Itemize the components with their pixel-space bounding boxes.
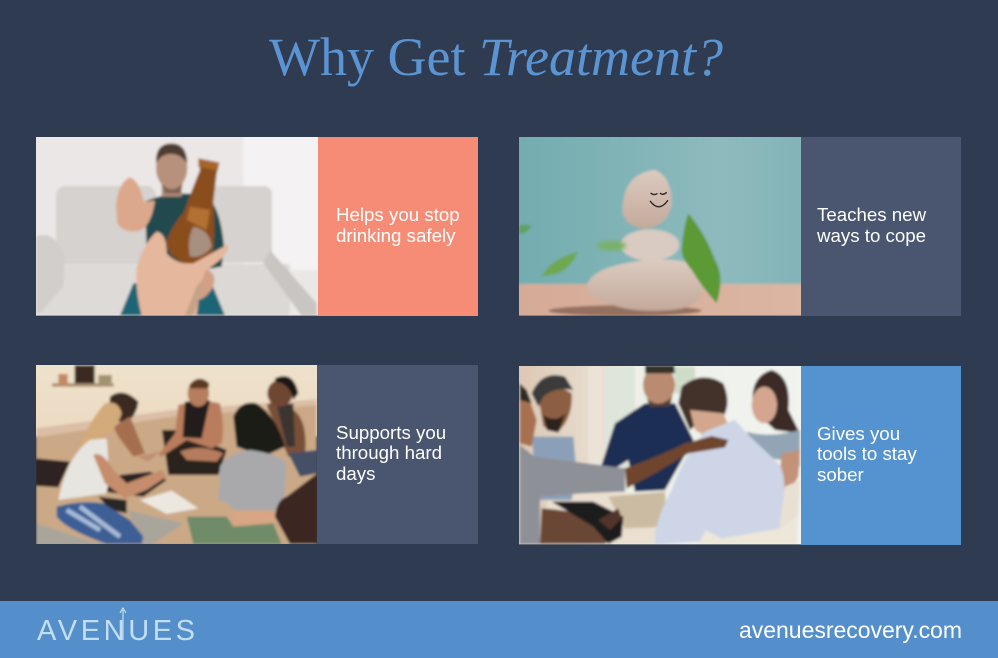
card text: helps you stop drinking safely: Helps you stop xyxy=(336,204,460,225)
panel: hard days xyxy=(30,360,478,546)
card text: gives you tools to stay sober: tools to stay xyxy=(817,443,917,464)
footer band xyxy=(0,601,998,658)
card text: supports you through hard days: days xyxy=(336,463,375,484)
logo: Avenues: AVENUES xyxy=(37,615,195,647)
panel: stop drinking xyxy=(30,130,478,320)
photo: support group with hand on shoulder xyxy=(515,360,808,550)
title: Why Get Treatment? xyxy=(269,27,723,87)
card text: gives you tools to stay sober: Gives you xyxy=(817,423,900,444)
website address: avenuesrecovery.com xyxy=(739,617,962,643)
callout color block: blue xyxy=(801,366,961,545)
card text: supports you through hard days: through hard xyxy=(336,442,442,463)
photo: man refusing a beer bottle xyxy=(30,130,323,320)
photo: group sitting on yoga mats xyxy=(30,360,323,546)
icon: smiling face xyxy=(650,193,668,207)
panel: stay sober xyxy=(515,360,961,550)
card text: helps you stop drinking safely: drinking safely xyxy=(336,225,456,246)
callout color block: slate xyxy=(801,137,961,316)
card text: teaches new ways to cope: Teaches new xyxy=(817,204,927,225)
panel: new ways to cope xyxy=(515,130,961,321)
callout color block: coral xyxy=(318,137,478,316)
card text: teaches new ways to cope: ways to cope xyxy=(816,225,926,246)
card text: gives you tools to stay sober: sober xyxy=(817,464,864,485)
callout color block: slate xyxy=(317,365,478,544)
card text: supports you through hard days: Supports you xyxy=(336,422,446,443)
photo: smiling balanced stones xyxy=(515,130,808,321)
